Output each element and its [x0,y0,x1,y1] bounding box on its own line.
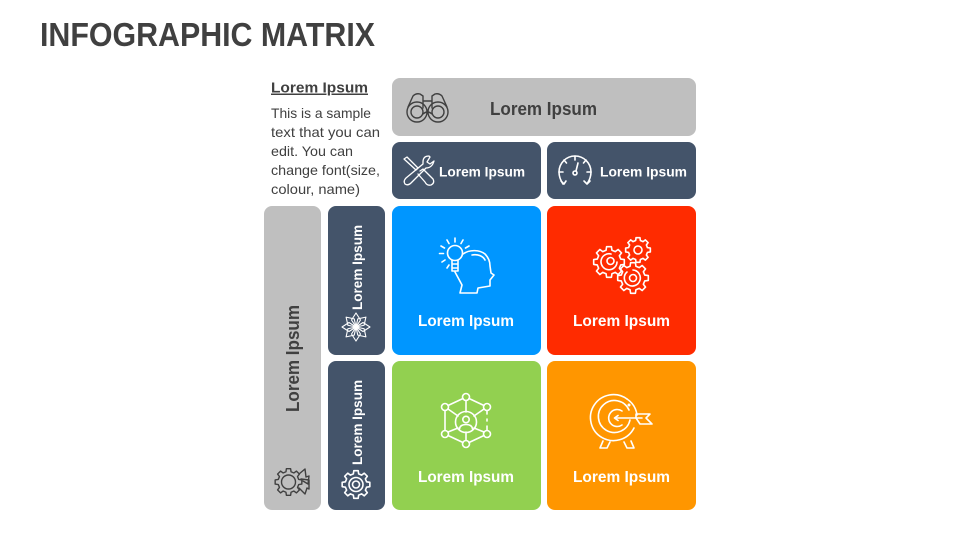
panel: dark header two [547,142,696,199]
side label: Lorem Ipsum [283,305,303,412]
label: Lorem Ipsum [573,313,670,330]
icon: network [442,394,490,448]
text block body: colour, name) [271,181,360,197]
panel: orange cell [547,361,696,510]
label: Lorem Ipsum [439,164,525,180]
panel: blue cell [392,206,541,355]
icon: award gear [275,469,309,495]
panel: dark side two [328,361,385,510]
label: Lorem Ipsum [349,380,365,465]
text block body: edit. You can [271,143,353,159]
panel: red cell [547,206,696,355]
panel: left gray side [264,206,321,510]
text block: description [271,80,380,197]
icon: tools [404,156,434,185]
panel: green cell [392,361,541,510]
label: Lorem Ipsum [573,469,670,486]
label: Lorem Ipsum [600,164,687,180]
icon: gears [594,238,650,293]
icon: target [590,395,652,448]
title: INFOGRAPHIC MATRIX [40,16,375,53]
panel: dark header one [392,142,541,199]
panel: top gray header [392,78,696,136]
text block heading: Lorem Ipsum [271,80,368,96]
icon: gear [342,471,370,498]
icon: flower [342,313,370,341]
text block body: This is a sample [271,105,371,121]
label: Lorem Ipsum [418,469,514,486]
icon: head with lightbulb [440,238,494,293]
text block body: change font(size, [271,162,380,178]
text block body [271,105,380,197]
icon: binoculars [407,94,448,122]
label: Lorem Ipsum [418,313,514,330]
icon: speedometer [559,156,591,184]
label: Lorem Ipsum [349,225,365,310]
panel: dark side one [328,206,385,355]
text block body: text that you can [271,124,380,140]
header label: Lorem Ipsum [490,99,597,119]
